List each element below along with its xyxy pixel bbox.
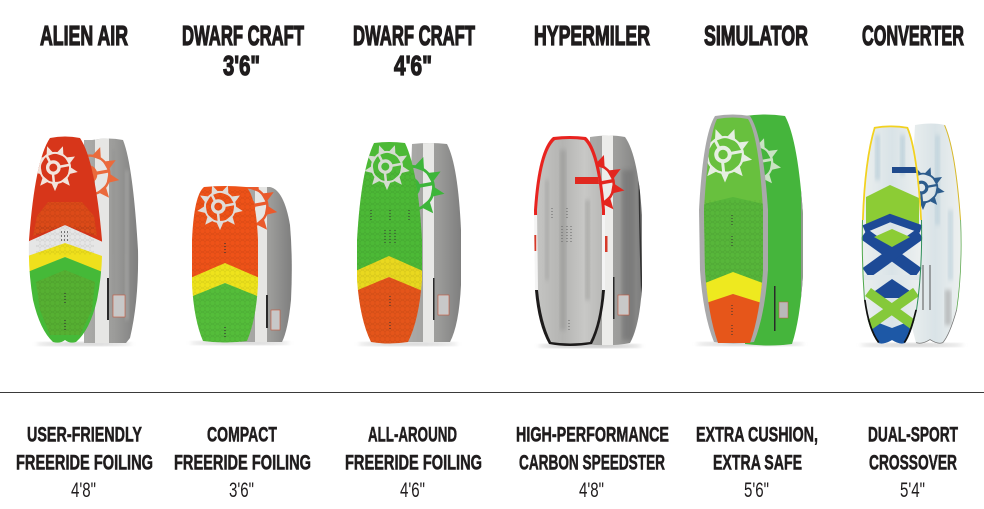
caption: Simulator: EXTRA SAFE xyxy=(713,452,802,474)
caption: Simulator xyxy=(696,424,818,502)
caption: Alien Air: USER-FRIENDLY xyxy=(27,424,142,446)
caption: Dwarf Craft 3'6": 3'6" xyxy=(229,479,254,502)
caption: Dwarf Craft 3'6" xyxy=(174,424,311,502)
board: Converter xyxy=(858,120,965,348)
caption: Alien Air: 4'8" xyxy=(71,479,96,502)
caption: Hypermiler: HIGH-PERFORMANCE xyxy=(516,424,669,446)
caption: Hypermiler: 4'8" xyxy=(579,479,604,502)
caption: Alien Air: FREERIDE FOILING xyxy=(16,452,153,474)
board: Alien Air xyxy=(28,136,138,346)
heading: Hypermiler: HYPERMILER xyxy=(534,20,650,51)
caption: Alien Air xyxy=(16,424,153,502)
heading: Alien Air: ALIEN AIR xyxy=(40,20,128,51)
caption: Dwarf Craft 3'6": FREERIDE FOILING xyxy=(174,452,311,474)
caption: Dwarf Craft 4'6" xyxy=(345,424,482,502)
board: Simulator xyxy=(695,110,807,350)
board: Dwarf Craft 4'6" xyxy=(353,140,465,346)
board: Dwarf Craft 3'6" xyxy=(192,186,292,346)
caption: Dwarf Craft 4'6": 4'6" xyxy=(400,479,425,502)
caption: Dwarf Craft 4'6": FREERIDE FOILING xyxy=(345,452,482,474)
divider line xyxy=(0,392,984,394)
caption: Hypermiler: CARBON SPEEDSTER xyxy=(519,452,665,474)
caption: Converter xyxy=(868,424,958,502)
navy cross xyxy=(864,218,921,273)
board: Hypermiler xyxy=(530,132,645,350)
heading: Dwarf Craft 3'6": DWARF CRAFT xyxy=(182,20,304,51)
caption: Dwarf Craft 3'6": COMPACT xyxy=(207,424,277,446)
caption: Hypermiler xyxy=(516,424,669,502)
heading: Simulator: SIMULATOR xyxy=(704,20,808,51)
caption: Simulator: EXTRA CUSHION, xyxy=(696,424,818,446)
heading: Dwarf Craft 4'6": DWARF CRAFT xyxy=(353,20,475,51)
caption: Converter: 5'4" xyxy=(900,479,925,502)
caption: Dwarf Craft 4'6": ALL-AROUND xyxy=(368,424,457,446)
heading: Dwarf Craft 3'6": 3'6" xyxy=(223,50,260,81)
chevron top pad xyxy=(866,185,919,226)
caption: Simulator: 5'6" xyxy=(744,479,769,502)
heading: Dwarf Craft 4'6" xyxy=(353,20,475,81)
heading: Dwarf Craft 4'6": 4'6" xyxy=(394,50,432,81)
heading: Dwarf Craft 3'6" xyxy=(182,20,304,81)
